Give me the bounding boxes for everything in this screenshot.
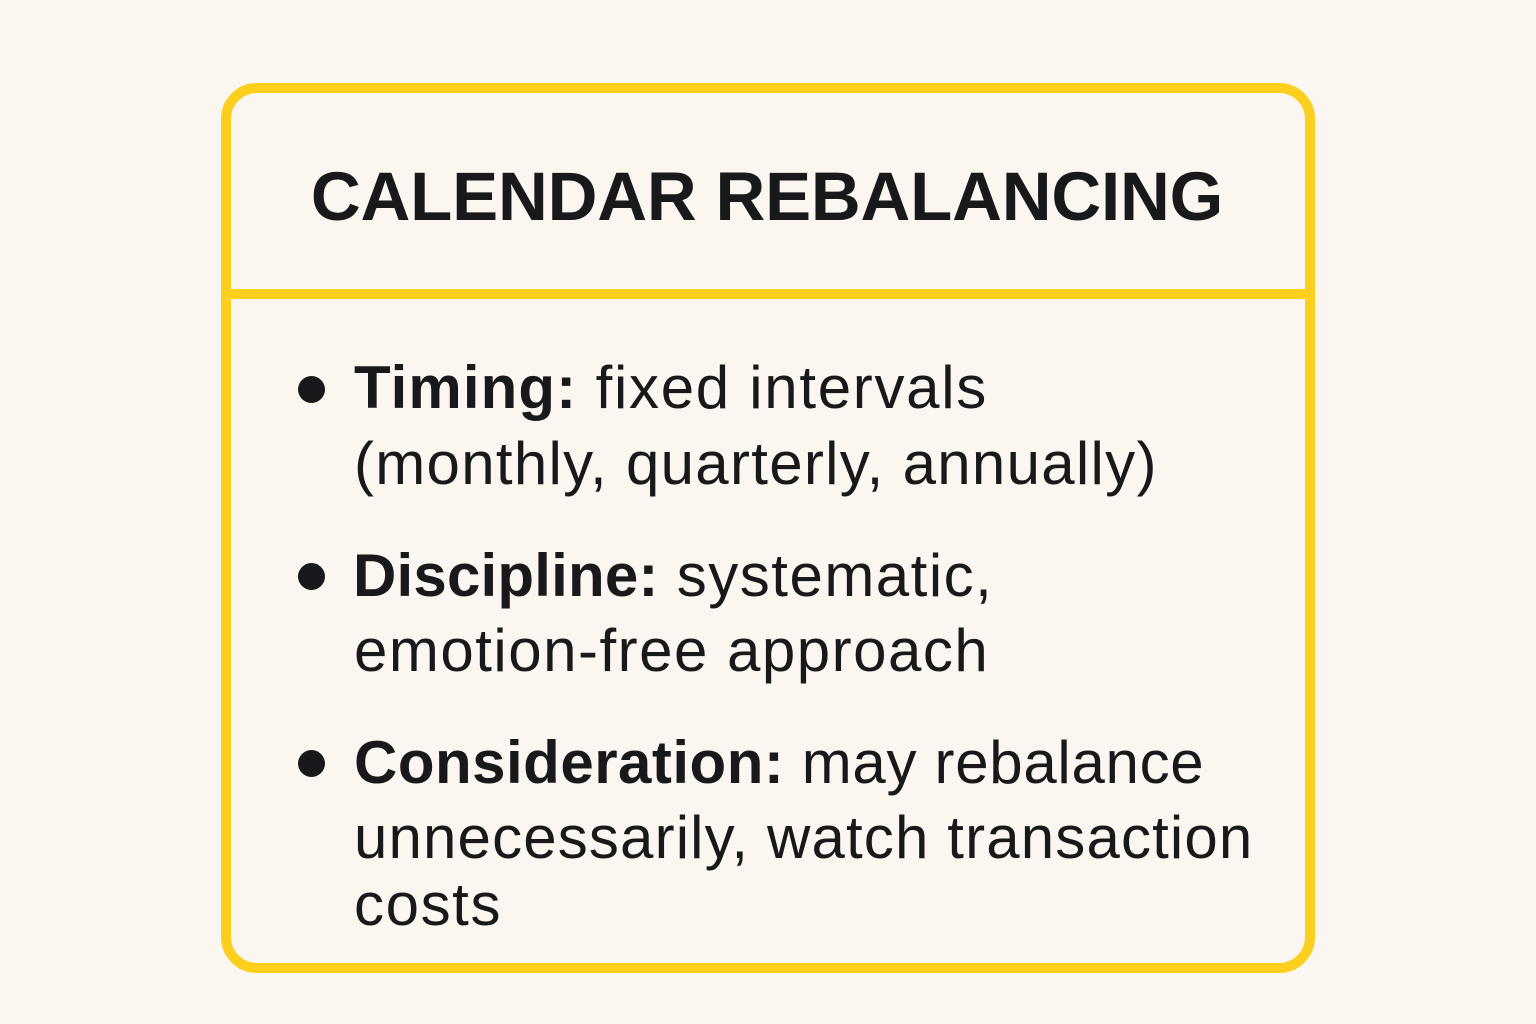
panel: calendar rebalancing card — [221, 83, 1315, 973]
text: timing line 2: (monthly, quarterly, annually) — [354, 430, 1158, 497]
bullet: discipline — [298, 563, 325, 590]
bullet: consideration — [298, 750, 325, 777]
divider under heading — [226, 288, 1310, 299]
text: discipline line 2: emotion-free approach — [354, 617, 989, 684]
text: consideration line 3: costs — [354, 871, 502, 938]
bullet: timing — [298, 376, 325, 403]
text: timing line 1: Timing: fixed intervals — [354, 354, 988, 421]
text: discipline line 1: Discipline: systematic, — [353, 542, 993, 609]
text: consideration line 2: unnecessarily, watch transaction — [354, 804, 1253, 871]
title: CALENDAR REBALANCING — [311, 158, 1223, 235]
text: consideration line 1: Consideration: may rebalance — [354, 729, 1204, 796]
